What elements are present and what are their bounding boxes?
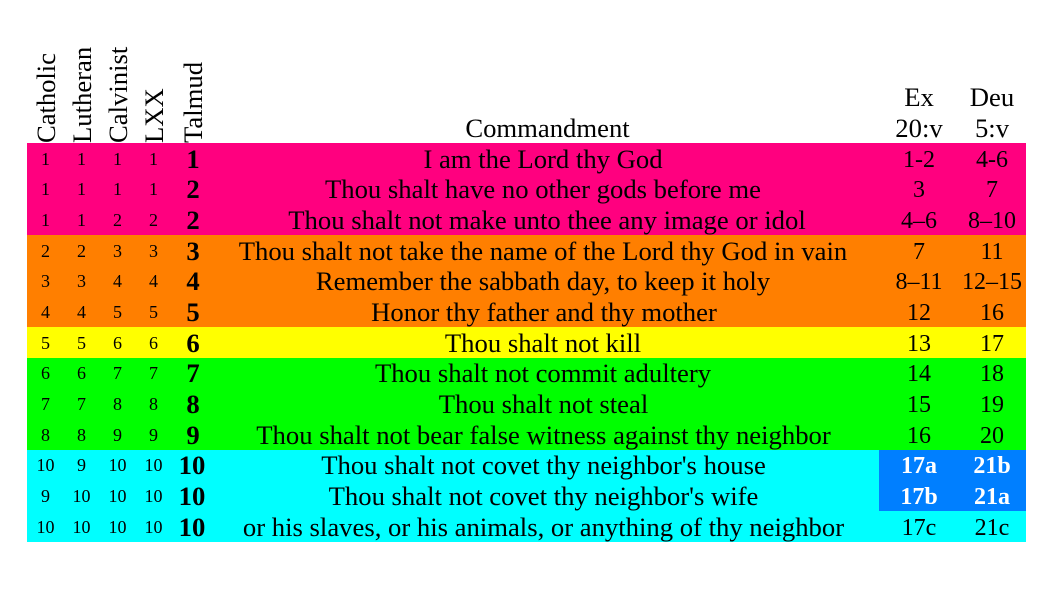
row 12: 21a <box>974 484 1010 510</box>
row 4: 2 <box>41 241 50 261</box>
header row <box>31 46 1014 143</box>
row 10: 20 <box>980 423 1004 449</box>
row 2: 2 <box>186 174 200 204</box>
header: Lutheran: Lutheran <box>67 47 97 143</box>
row 10: 16 <box>907 423 931 449</box>
row 7: 6 <box>149 333 158 353</box>
row 9: 8 <box>186 389 200 419</box>
row 1: I am the Lord thy God <box>423 144 663 174</box>
row 3: 4–6 <box>901 208 937 234</box>
row 2: 3 <box>913 177 925 203</box>
row 3: 2 <box>149 210 158 230</box>
row 13: 17c <box>902 515 936 541</box>
row 7: 6 <box>186 328 200 358</box>
row 4: 3 <box>113 241 122 261</box>
row 9: Thou shalt not steal <box>439 389 648 419</box>
row 3: 1 <box>77 210 86 230</box>
row 12: 10 <box>144 486 162 506</box>
header: Exodus verse: 20:v <box>895 113 943 143</box>
row 6: 5 <box>113 302 122 322</box>
row 7: 5 <box>77 333 86 353</box>
row 4: 3 <box>186 236 200 266</box>
row 12: 10 <box>108 486 126 506</box>
row 10: 8 <box>77 425 86 445</box>
row 7 <box>41 328 1004 358</box>
header: Catholic: Catholic <box>31 53 61 143</box>
header: LXX: LXX <box>139 88 169 143</box>
row 13: or his slaves, or his animals, or anything of thy neighbor <box>243 512 844 542</box>
row 5: 3 <box>77 271 86 291</box>
header: Calvinist: Calvinist <box>103 46 133 143</box>
row 2: 7 <box>986 177 998 203</box>
row 1: 1 <box>113 149 122 169</box>
row 6: 5 <box>149 302 158 322</box>
row 13: 10 <box>108 517 126 537</box>
row 1: 1-2 <box>903 147 935 173</box>
row 6: 4 <box>41 302 50 322</box>
header: Deuteronomy verse: Deu <box>970 82 1014 112</box>
row 6: 5 <box>186 297 200 327</box>
row 10: Thou shalt not bear false witness against thy neighbor <box>256 420 831 450</box>
row 7: 17 <box>980 331 1004 357</box>
header: Exodus verse <box>895 82 943 143</box>
header: Commandment: Commandment <box>465 113 630 143</box>
row 7: 13 <box>907 331 931 357</box>
row 3: Thou shalt not make unto thee any image or idol <box>288 205 806 235</box>
row 9: 7 <box>77 394 86 414</box>
row 12: 10 <box>179 481 205 511</box>
row 5: 4 <box>113 271 122 291</box>
row 3 <box>41 205 1016 235</box>
header: Deuteronomy verse <box>970 82 1014 143</box>
row 6: 4 <box>77 302 86 322</box>
row 8: 6 <box>77 363 86 383</box>
row 6: 16 <box>980 300 1004 326</box>
row 2: 1 <box>77 179 86 199</box>
row 1: 1 <box>77 149 86 169</box>
row 12: 17b <box>900 484 938 510</box>
row 2: 1 <box>41 179 50 199</box>
row 11: 21b <box>973 453 1011 479</box>
row 12 <box>41 481 1010 511</box>
row 9: 19 <box>980 392 1004 418</box>
row 8: 18 <box>980 361 1004 387</box>
header: Deuteronomy verse: 5:v <box>975 113 1010 143</box>
row 4: 11 <box>980 239 1004 265</box>
row 6: 12 <box>907 300 931 326</box>
row 4: 7 <box>913 239 925 265</box>
band: cyan rows <box>27 450 1026 542</box>
row 5: 4 <box>149 271 158 291</box>
row 1 <box>41 144 1008 174</box>
row 2 <box>41 174 998 204</box>
row 11: Thou shalt not covet thy neighbor's house <box>321 450 766 480</box>
row 3: 2 <box>186 205 200 235</box>
row 11: 9 <box>77 455 86 475</box>
row 6: Honor thy father and thy mother <box>371 297 717 327</box>
band: pink rows <box>27 143 1026 235</box>
row 13: 10 <box>72 517 90 537</box>
row 4: Thou shalt not take the name of the Lord thy God in vain <box>239 236 847 266</box>
row 1: 4-6 <box>976 147 1008 173</box>
band: yellow row <box>27 327 1026 358</box>
band: orange rows <box>27 235 1026 327</box>
row 10: 9 <box>113 425 122 445</box>
row 5 <box>41 266 1022 296</box>
row 10: 8 <box>41 425 50 445</box>
row 12: 9 <box>41 486 50 506</box>
band: green rows <box>27 358 1026 450</box>
row 8 <box>41 358 1004 388</box>
row 5: 4 <box>186 266 200 296</box>
row 8: Thou shalt not commit adultery <box>375 358 712 388</box>
row 11: 10 <box>36 455 54 475</box>
row 6 <box>41 297 1004 327</box>
row 13 <box>36 512 1009 542</box>
row 1: 1 <box>186 144 200 174</box>
row 12: Thou shalt not covet thy neighbor's wife <box>329 481 758 511</box>
row 13: 10 <box>144 517 162 537</box>
row 7: 5 <box>41 333 50 353</box>
row 9: 8 <box>149 394 158 414</box>
row 10: 9 <box>149 425 158 445</box>
row 8: 6 <box>41 363 50 383</box>
row 3: 1 <box>41 210 50 230</box>
row 2: Thou shalt have no other gods before me <box>325 174 761 204</box>
row 3: 8–10 <box>968 208 1016 234</box>
row 2: 1 <box>149 179 158 199</box>
row 8: 7 <box>113 363 122 383</box>
row 9: 7 <box>41 394 50 414</box>
row 1: 1 <box>41 149 50 169</box>
row 12: 10 <box>72 486 90 506</box>
row 8: 7 <box>186 358 200 388</box>
row 11: 10 <box>144 455 162 475</box>
row 13: 10 <box>179 512 205 542</box>
row 5: Remember the sabbath day, to keep it holy <box>316 266 771 296</box>
row 5: 12–15 <box>962 269 1022 295</box>
row 9: 15 <box>907 392 931 418</box>
row 8: 14 <box>907 361 931 387</box>
row 10: 9 <box>186 420 200 450</box>
row 13: 21c <box>975 515 1009 541</box>
row 4: 2 <box>77 241 86 261</box>
row 7: 6 <box>113 333 122 353</box>
row 7: Thou shalt not kill <box>445 328 641 358</box>
row 13: 10 <box>36 517 54 537</box>
row 4: 3 <box>149 241 158 261</box>
row 10 <box>41 420 1004 450</box>
highlight: blue verse cells <box>879 450 1026 511</box>
row 1: 1 <box>149 149 158 169</box>
row 11: 17a <box>901 453 937 479</box>
row 5: 8–11 <box>895 269 943 295</box>
row 3: 2 <box>113 210 122 230</box>
row 11: 10 <box>179 450 205 480</box>
header: Talmud: Talmud <box>178 62 208 143</box>
row 2: 1 <box>113 179 122 199</box>
row 9 <box>41 389 1004 419</box>
row 4 <box>41 236 1004 266</box>
row 8: 7 <box>149 363 158 383</box>
row 11 <box>36 450 1011 480</box>
row 5: 3 <box>41 271 50 291</box>
row 11: 10 <box>108 455 126 475</box>
row 9: 8 <box>113 394 122 414</box>
header: Exodus verse: Ex <box>904 82 934 112</box>
